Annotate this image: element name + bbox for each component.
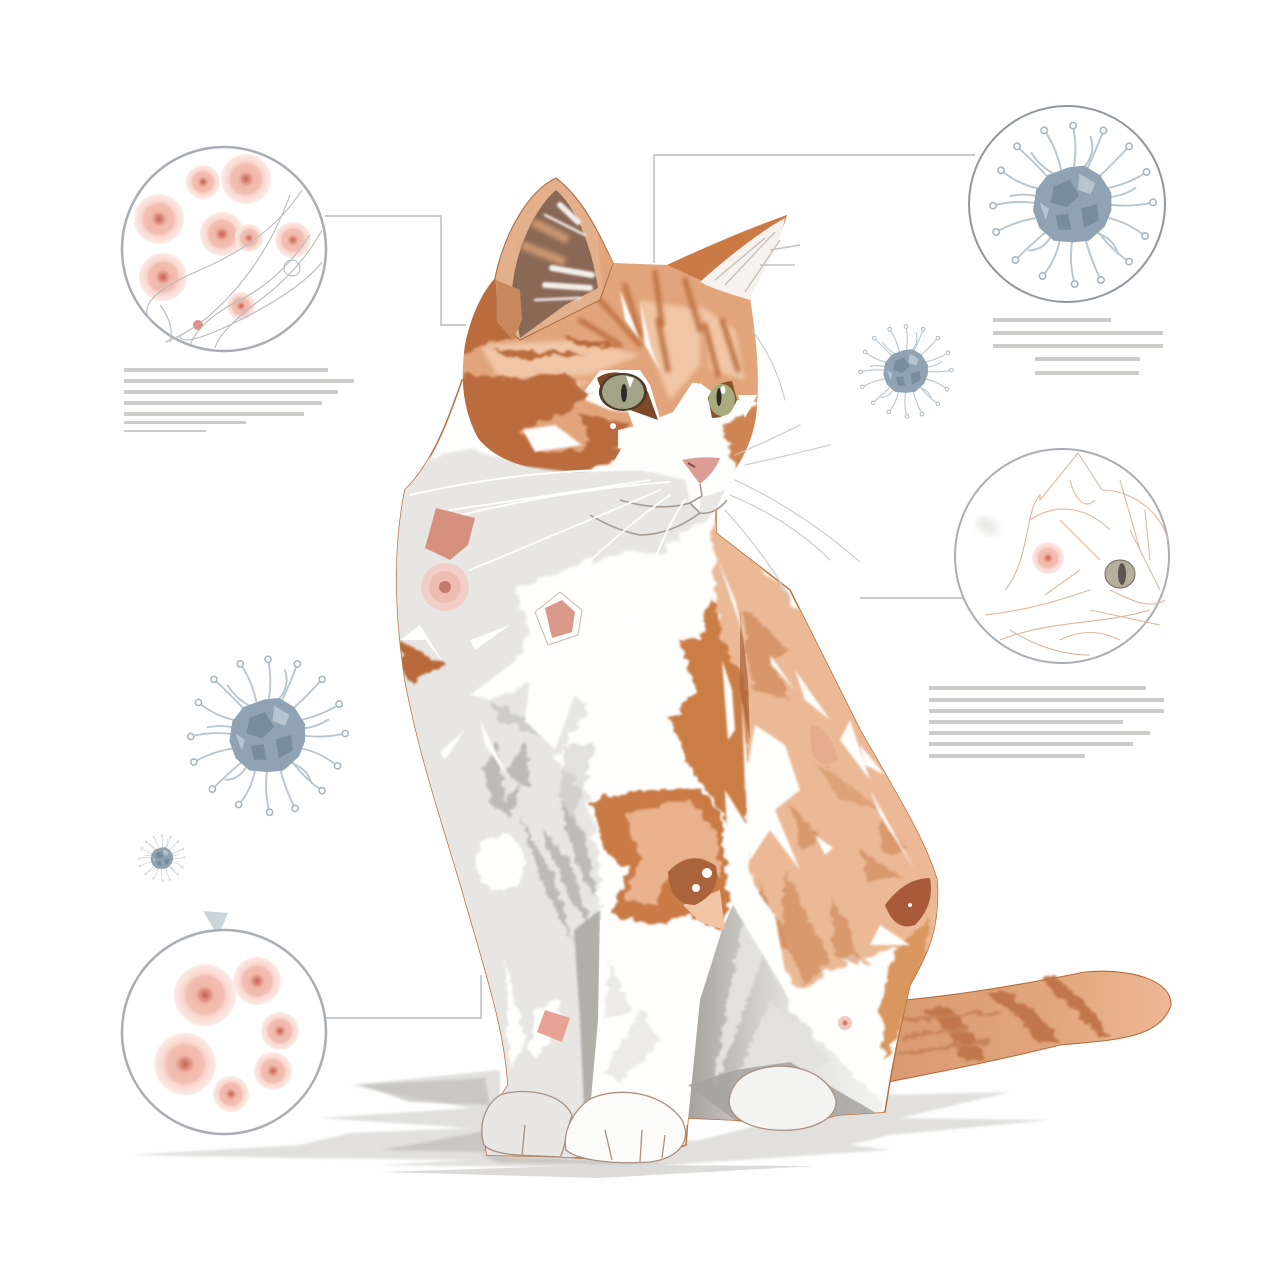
lower lesions: [537, 1010, 852, 1042]
head white base: [462, 380, 614, 472]
tail: [888, 971, 1171, 1082]
white face blaze: [614, 383, 698, 462]
icon: virus large: [990, 122, 1156, 287]
icon: virus left: [188, 656, 348, 815]
connector lines: [240, 155, 1006, 1018]
text placeholder: right: [929, 686, 1164, 758]
icon: floating virus upper right: [859, 325, 953, 418]
lower right orange strip: [880, 920, 930, 1060]
flank shading: [745, 610, 910, 985]
skin lesions on chest: [421, 508, 582, 645]
flank orange coat: [712, 520, 945, 990]
right eye: [708, 381, 737, 418]
fine fur lines: [147, 190, 322, 348]
dark left cheek: [450, 280, 630, 480]
light peach forehead and cheek: [480, 300, 745, 400]
white fur on chest: [400, 625, 580, 1070]
orange spot on chest side: [398, 640, 445, 684]
panel: bottom-left magnified lesions: [122, 911, 326, 1134]
lesions: [154, 957, 299, 1112]
panel: top-right magnified virus: [969, 106, 1165, 302]
hind paw: [729, 1066, 836, 1130]
orange patch on shoulder: [590, 787, 728, 930]
left ear: [495, 178, 613, 340]
panel: top-left magnified skin lesions: [122, 147, 326, 351]
right ear: [667, 215, 800, 300]
lesions: [134, 154, 311, 330]
grey chest and left leg: [380, 450, 720, 1170]
flank lesion: [885, 878, 931, 926]
text placeholder: top-right: [993, 318, 1163, 375]
lesion dots: [692, 868, 712, 892]
white hind belly: [784, 971, 895, 1099]
body fur, clipped to silhouette: [380, 450, 945, 1170]
cat body silhouette: [397, 380, 938, 1162]
head orange base: [462, 215, 787, 473]
lower face grey muzzle: [518, 464, 690, 502]
infographic canvas: [120, 105, 1172, 1178]
head fur, clipped to head: [462, 215, 787, 513]
front right leg: [591, 920, 688, 1125]
lesion on flank: [810, 725, 838, 764]
shadow strip between front legs: [574, 910, 600, 1110]
white fur on head: [523, 290, 660, 452]
white fur streaks on flank: [718, 560, 915, 1000]
dark fur streaks on chest: [483, 700, 596, 945]
front paws: [482, 1092, 685, 1163]
text placeholder: top-left: [124, 368, 354, 432]
nose and mouth: [590, 457, 727, 535]
ground shadow: [130, 1070, 1050, 1178]
dark orange strip: [670, 597, 750, 850]
right cheek orange: [722, 400, 760, 472]
whiskers: [410, 330, 860, 640]
sketch of cat head: [985, 453, 1168, 655]
hind haunch grey: [688, 882, 885, 1120]
panel: right magnified cat face: [955, 449, 1169, 663]
head stripes: [580, 272, 738, 375]
cat illustration: [380, 170, 1171, 1170]
shoulder lesion: [668, 858, 717, 905]
icon: small virus left: [138, 835, 186, 882]
left eye: [597, 372, 658, 420]
